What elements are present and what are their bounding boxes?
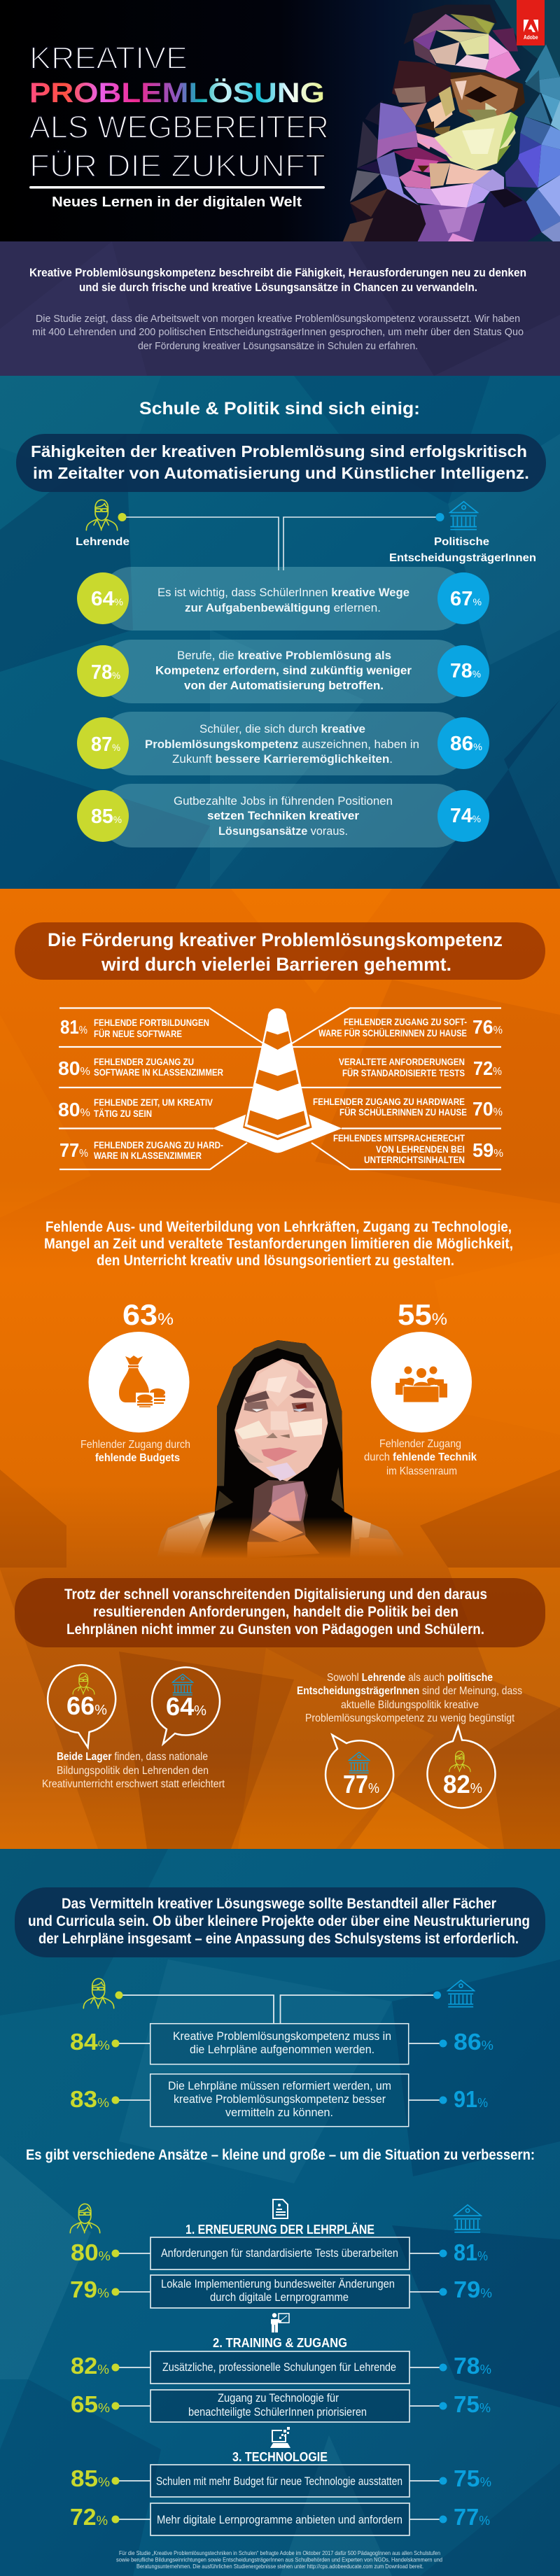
- row: Schulungen: [71, 2351, 491, 2384]
- heading: 1. Erneuerung der Lehrpläne: 1. ERNEUERUNG DER LEHRPLÄNE: [186, 2223, 374, 2237]
- barrier stat: 70: FÜR SCHÜLERINNEN ZU HAUSE: [340, 1106, 467, 1118]
- row: Lokale Implementierung: 79%: [454, 2276, 492, 2302]
- row 4: 85%: [91, 805, 122, 828]
- barrier stat: 77: FEHLENDER ZUGANG ZU HARD-: [94, 1139, 223, 1150]
- row 4: Lösungsansätze voraus.: [218, 825, 348, 838]
- barrier stat: 77: WARE IN KLASSENZIMMER: [94, 1150, 202, 1161]
- barrier stat: 76: [318, 1016, 503, 1039]
- row: Zugang zu Technologie: Zugang zu Technologie für: [218, 2392, 339, 2405]
- barrier stat: 72: FÜR STANDARDISIERTE TESTS: [342, 1067, 465, 1078]
- row: Anforderungen: 80%: [71, 2239, 111, 2265]
- stat: 63% budgets: [80, 1298, 190, 1464]
- comparison: Lehrpläne aufnehmen: 84%: [70, 2029, 110, 2055]
- speech bubble: 64%: [152, 1668, 220, 1744]
- text block: Sowohl Lehrende: [297, 1672, 522, 1724]
- heading: 3. Technologie: 3. TECHNOLOGIE: [232, 2450, 328, 2464]
- icon: government legend: [454, 2205, 481, 2232]
- row: Schulungen: Zusätzliche, professionelle Schulungen für Lehrende: [162, 2361, 396, 2374]
- barrier stat: 76: WARE FÜR SCHÜLERINNEN ZU HAUSE: [318, 1027, 467, 1039]
- row: Schulen mit mehr Budget: Schulen mit mehr Budget für neue Technologie ausstatten: [156, 2475, 402, 2488]
- row 4: 74%: [450, 805, 481, 827]
- barrier stat: 81: FEHLENDE FORTBILDUNGEN: [94, 1017, 209, 1028]
- row: Lokale Implementierung: [70, 2275, 492, 2308]
- row 3: 87%: [91, 733, 120, 756]
- stat: 55% technology: durch fehlende Technik: [364, 1451, 477, 1463]
- comparison: Lehrpläne aufnehmen: 86%: [454, 2029, 493, 2055]
- barrier stat: 80 software: SOFTWARE IN KLASSENZIMMER: [94, 1067, 223, 1078]
- heading pill: Digitalisierung: resultierenden Anforderungen, handelt die Politik bei den: [93, 1604, 458, 1620]
- title: ALS WEGBEREITER: [29, 109, 329, 145]
- row: Mehr digitale Lernprogramme: Mehr digitale Lernprogramme anbieten und anfordern: [157, 2514, 402, 2526]
- intro text block: Die Studie zeigt, dass die Arbeitswelt von morgen kreative Problemlösungskompetenz voraussetzt. Wir haben: [36, 313, 520, 325]
- icon: teacher legend: [70, 2204, 100, 2233]
- comparison: Lehrpläne reformieren: Die Lehrpläne müssen reformiert werden, um: [168, 2080, 391, 2092]
- heading: Schule & Politik: Schule & Politik sind sich einig:: [139, 399, 420, 418]
- row 3: Schüler, die sich durch kreative: [200, 723, 365, 736]
- row: Zugang zu Technologie: 75%: [454, 2391, 491, 2417]
- heading pill: Barrieren: Die Förderung kreativer Problemlösungskompetenz: [48, 929, 503, 950]
- barrier stat: 72: 72%: [473, 1057, 502, 1079]
- logo: Adobe: Adobe: [524, 34, 538, 41]
- barrier stat: 72: [339, 1056, 502, 1079]
- row: Schulen mit mehr Budget: 85%: [71, 2465, 110, 2491]
- row: Zugang zu Technologie: 65%: [71, 2391, 110, 2417]
- row 3: 86%: [450, 733, 482, 755]
- row: Schulungen: 82%: [71, 2353, 109, 2379]
- barrier stat: 77: [59, 1139, 223, 1161]
- text block: Beide Lager: Beide Lager finden, dass nationale: [57, 1751, 208, 1763]
- speech bubble: 77%: [326, 1735, 393, 1808]
- stat: 63% budgets: Fehlender Zugang durch: [80, 1439, 190, 1451]
- divider lines around cone: [59, 1008, 501, 1169]
- comparison: Lehrpläne reformieren: vermitteln zu können.: [225, 2106, 333, 2119]
- header portrait: low-poly woman: [343, 0, 560, 241]
- row: Zugang zu Technologie: benachteiligte SchülerInnen priorisieren: [188, 2406, 367, 2419]
- row: Schulen mit mehr Budget: 75%: [454, 2465, 491, 2491]
- title: FÜR DIE ZUKUNFT: [29, 149, 326, 183]
- row: Mehr digitale Lernprogramme: [70, 2503, 490, 2535]
- comparison: Lehrpläne aufnehmen: die Lehrpläne aufgenommen werden.: [190, 2043, 374, 2056]
- legend: Politische EntscheidungsträgerInnen: [389, 502, 536, 564]
- row: Schulen mit mehr Budget: [71, 2465, 491, 2497]
- text block: Sowohl Lehrende: Problemlösungskompetenz zu wenig begünstigt: [305, 1712, 515, 1724]
- row 2: 78%: [91, 661, 120, 684]
- intro text block: mit 400 Lehrenden und 200 politischen EntscheidungsträgerInnen gesprochen, um mehr über den Status Quo: [32, 326, 524, 338]
- legend: Lehrende: [76, 500, 130, 548]
- row 2: Kompetenz erfordern, sind zukünftig weniger: [155, 665, 412, 677]
- comparison: Lehrpläne reformieren: 91%: [454, 2086, 488, 2112]
- text block: Beide Lager: Bildungspolitik den Lehrenden den: [57, 1765, 209, 1777]
- icon: trainer at board: [271, 2313, 289, 2332]
- heading pill: Digitalisierung: Lehrplänen nicht immer zu Gunsten von Pädagogen und Schülern.: [66, 1621, 484, 1638]
- icon: traffic cone: [212, 1008, 342, 1153]
- stat: 55% technology: 55%: [398, 1298, 447, 1331]
- row 1: 64%: [91, 588, 123, 610]
- speech bubble: 64%: 64%: [166, 1692, 206, 1721]
- title: Neues Lernen in der digitalen Welt: [52, 195, 302, 210]
- comparison: Lehrpläne reformieren: kreative Problemlösungskompetenz besser: [174, 2093, 386, 2106]
- barrier stat: 70: [313, 1096, 503, 1120]
- stat: 55% technology: Fehlender Zugang: [379, 1438, 461, 1450]
- row 1: zur Aufgabenbewältigung erlernen.: [185, 602, 381, 614]
- icon: document: [273, 2200, 288, 2218]
- barrier stat: 80 time: [58, 1097, 214, 1120]
- text block: Sowohl Lehrende: EntscheidungsträgerInnen sind der Meinung, dass: [297, 1685, 522, 1697]
- legend: Politische EntscheidungsträgerInnen: Politische: [434, 536, 489, 548]
- text block: Sowohl Lehrende: Sowohl Lehrende als auch politische: [327, 1672, 493, 1684]
- row 4: setzen Techniken kreativer: [207, 810, 360, 822]
- barrier stat: 80 time: TÄTIG ZU SEIN: [94, 1108, 152, 1119]
- speech bubble: 66%: [48, 1665, 115, 1747]
- barrier stat: 77: 77%: [59, 1139, 88, 1161]
- icon: money bag: [119, 1356, 165, 1407]
- footnote: [116, 2549, 442, 2570]
- logo: Adobe: [517, 0, 545, 45]
- heading pill: Lösungswege: Das Vermitteln kreativer Lösungswege sollte Bestandteil aller Fächer: [62, 1896, 496, 1912]
- row: Lokale Implementierung: 79%: [70, 2276, 109, 2302]
- barrier stat: 81: 81%: [60, 1016, 88, 1038]
- row 4: [77, 784, 489, 847]
- text block: Beide Lager: [42, 1751, 225, 1790]
- comparison: Lehrpläne aufnehmen: Kreative Problemlösungskompetenz muss in: [173, 2030, 391, 2043]
- comparison: Lehrpläne aufnehmen: [70, 2024, 493, 2064]
- row 2: Berufe, die kreative Problemlösung als: [177, 649, 391, 662]
- illustration: low-poly woman: [156, 1340, 404, 1561]
- barrier stat: 80 software: 80%: [58, 1057, 90, 1079]
- barrier stat: 72: VERALTETE ANFORDERUNGEN: [339, 1056, 465, 1067]
- heading pill: Digitalisierung: Trotz der schnell voranschreitenden Digitalisierung und den daraus: [64, 1586, 487, 1603]
- comparison: Lehrpläne reformieren: [70, 2074, 488, 2127]
- row 3: Problemlösungskompetenz auszeichnen, haben in: [145, 738, 419, 751]
- row: Mehr digitale Lernprogramme: 72%: [70, 2504, 108, 2530]
- stat: 55% technology: im Klassenraum: [386, 1465, 457, 1477]
- barrier stat: 70: 70%: [472, 1098, 503, 1120]
- row: Anforderungen: 81%: [454, 2239, 488, 2265]
- row 1: 67%: [450, 588, 482, 610]
- barrier stat: 59: 59%: [472, 1139, 503, 1161]
- speech bubble: 82%: 82%: [443, 1770, 482, 1799]
- comparison: Lehrpläne reformieren: 83%: [70, 2086, 109, 2112]
- stat: 63% budgets: 63%: [122, 1298, 174, 1331]
- text block: Fehlende Aus- und Weiterbildung: [44, 1219, 513, 1269]
- row 3: Zukunft bessere Karrieremöglichkeiten .: [172, 753, 393, 766]
- heading pill: Fähigkeiten: im Zeitalter von Automatisierung und Künstlicher Intelligenz.: [33, 464, 529, 482]
- heading: 2. Training & Zugang: 2. TRAINING & ZUGANG: [213, 2336, 347, 2350]
- row: Schulungen: 78%: [454, 2353, 491, 2379]
- title: [29, 41, 329, 210]
- legend: Lehrende: Lehrende: [76, 536, 130, 548]
- speech bubble: 82%: [428, 1726, 496, 1808]
- barrier stat: 70: FEHLENDER ZUGANG ZU HARDWARE: [313, 1096, 465, 1107]
- heading pill: Barrieren: wird durch vielerlei Barrieren gehemmt.: [101, 954, 451, 975]
- barrier stat: 81: FÜR NEUE SOFTWARE: [94, 1028, 182, 1039]
- text block: Sowohl Lehrende: aktuelle Bildungspolitik kreative: [341, 1699, 479, 1711]
- row: Lokale Implementierung: Lokale Implementierung bundesweiter Änderungen: [161, 2278, 395, 2290]
- footnote: sowie berufliche Bildungseinrichtungen sowie EntscheidungsträgerInnen aus Schulbehörden und Experten von NGOs, Handelskammern und: [116, 2556, 442, 2563]
- barrier stat: 80 time: FEHLENDE ZEIT, UM KREATIV: [94, 1097, 214, 1108]
- heading pill: Barrieren: [15, 922, 545, 980]
- heading pill: Digitalisierung: [15, 1578, 545, 1647]
- row: Anforderungen: Anforderungen für standardisierte Tests überarbeiten: [161, 2247, 398, 2260]
- text block: Fehlende Aus- und Weiterbildung: Mangel an Zeit und veraltete Testanforderungen limitieren die Möglichkeit,: [44, 1236, 513, 1252]
- heading pill: Lösungswege: [15, 1887, 545, 1957]
- barrier stat: 59: [333, 1132, 503, 1165]
- row: Lokale Implementierung: durch digitale Lernprogramme: [210, 2291, 349, 2304]
- speech bubble: 77%: 77%: [343, 1770, 379, 1799]
- barrier stat: 76: 76%: [472, 1016, 503, 1038]
- row: Mehr digitale Lernprogramme: 77%: [454, 2504, 490, 2530]
- row 2: von der Automatisierung betroffen.: [184, 680, 384, 692]
- speech bubble: 66%: 66%: [66, 1691, 107, 1720]
- row 1: [77, 567, 489, 631]
- barrier stat: 59: VON LEHRENDEN BEI: [376, 1143, 465, 1155]
- text block: Fehlende Aus- und Weiterbildung: den Unterricht kreativ und lösungsorientiert zu gestalten.: [97, 1253, 454, 1269]
- barrier stat: 59: FEHLENDES MITSPRACHERECHT: [333, 1132, 465, 1143]
- row 4: Gutbezahlte Jobs in führenden Positionen: [174, 795, 393, 808]
- intro text block: Kreative Problemlösungskompetenz beschreibt die Fähigkeit, Herausforderungen neu zu denken: [29, 267, 526, 279]
- text block: Fehlende Aus- und Weiterbildung: Fehlende Aus- und Weiterbildung von Lehrkräften, Zugang zu Technologie,: [46, 1219, 512, 1235]
- stat: 63% budgets: fehlende Budgets: [95, 1452, 180, 1464]
- legend: Politische EntscheidungsträgerInnen: EntscheidungsträgerInnen: [389, 552, 536, 564]
- row 3: [77, 712, 489, 775]
- row: Anforderungen: [71, 2237, 488, 2269]
- intro text block: [29, 267, 526, 352]
- barrier stat: 80 time: 80%: [58, 1099, 90, 1120]
- barrier stat: 80 software: FEHLENDER ZUGANG ZU: [94, 1056, 194, 1067]
- row 1: Es ist wichtig, dass SchülerInnen kreative Wege: [158, 586, 410, 599]
- intro text block: der Förderung kreativer Lösungsansätze in Schulen zu erfahren.: [138, 340, 418, 352]
- title: KREATIVE: [29, 41, 188, 76]
- footnote: Beratungsunternehmen. Die ausführlichen Studienergebnisse stehen unter http://cps.adobeeducate.com zum Download bereit.: [136, 2563, 424, 2570]
- barrier stat: 80 software: [58, 1056, 223, 1079]
- icon: laptop: [270, 2427, 290, 2448]
- text block: Beide Lager: Kreativunterricht erschwert statt erleichtert: [42, 1778, 225, 1790]
- row: Zugang zu Technologie: [71, 2390, 491, 2422]
- barrier stat: 81: [60, 1016, 209, 1039]
- stat: 55% technology: [364, 1298, 477, 1477]
- intro text block: und sie durch frische und kreative Lösungsansätze in Chancen zu verwandeln.: [79, 281, 477, 294]
- title: PROBLEMLÖSUNG: [29, 77, 325, 108]
- connector lines with icons: [83, 1978, 474, 2023]
- row 2: [77, 640, 489, 703]
- barrier stat: 76: FEHLENDER ZUGANG ZU SOFT-: [344, 1016, 467, 1027]
- heading pill: Fähigkeiten: Fähigkeiten der kreativen Problemlösung sind erfolgskritisch: [31, 442, 527, 460]
- footnote: Für die Studie „Kreative Problemlösungstechniken in Schulen“ befragte Adobe im Oktober 2017 dafür 500 PädagogInnen aus allen Schulstufen: [119, 2549, 440, 2556]
- heading pill: Fähigkeiten: [16, 434, 546, 492]
- icon: students at desk: [396, 1366, 447, 1402]
- row 2: 78%: [450, 660, 481, 682]
- connector lines: [122, 517, 440, 570]
- barrier stat: 59: UNTERRICHTSINHALTEN: [364, 1154, 465, 1165]
